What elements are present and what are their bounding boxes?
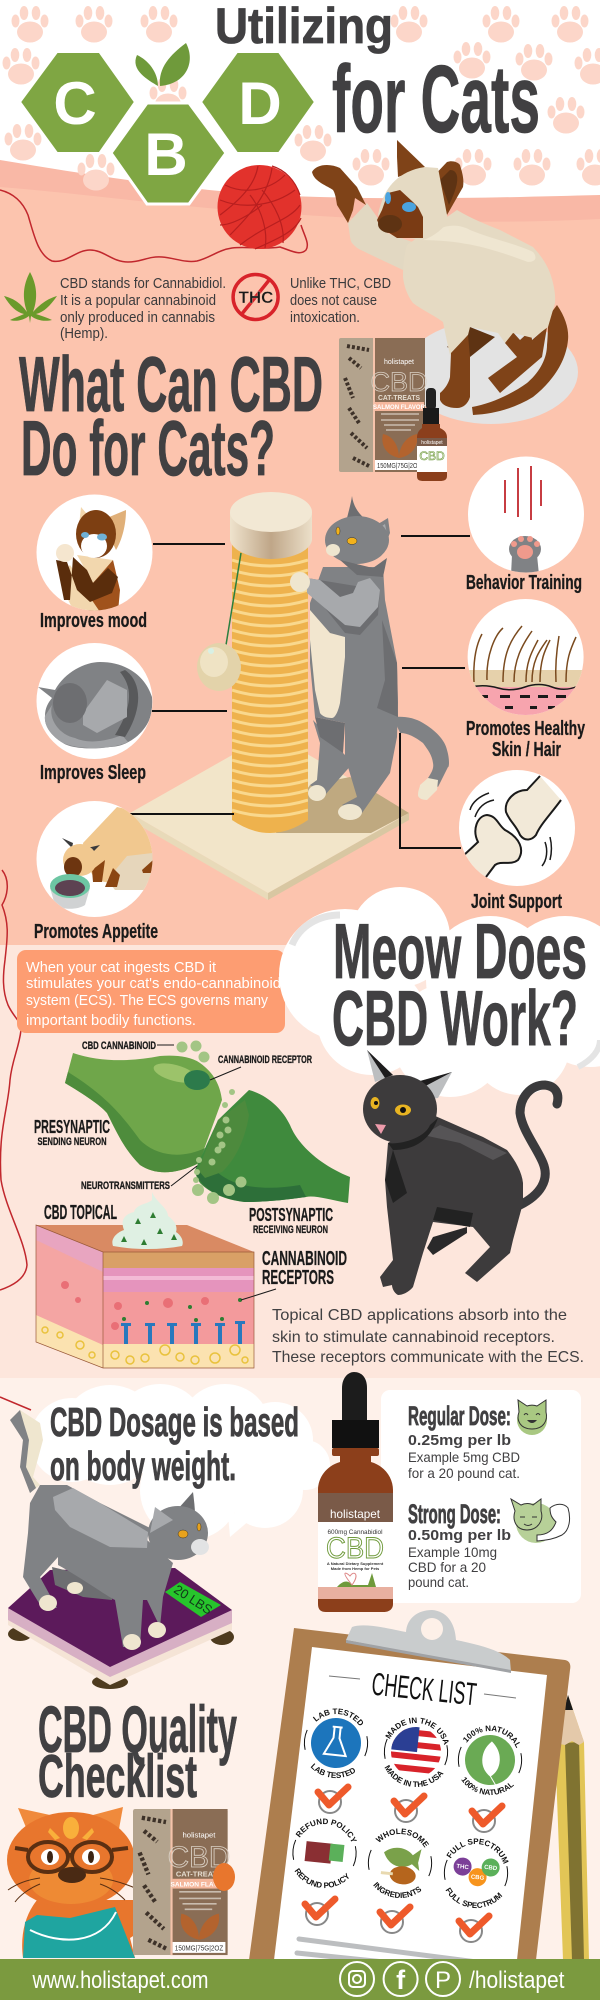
badge: made in the USA: MADE IN THE USA bbox=[385, 1718, 449, 1745]
icon: facebook: f bbox=[396, 1965, 406, 1995]
receptors bbox=[121, 1321, 245, 1344]
badge: 100% natural bbox=[458, 1726, 522, 1796]
postsynaptic neuron bbox=[195, 1090, 350, 1203]
hexagon B bbox=[111, 103, 226, 204]
product: small dropper bottle: holistapet bbox=[421, 440, 443, 446]
badge: full spectrum bbox=[444, 1838, 509, 1908]
circle: improves mood bbox=[36, 494, 152, 612]
tail bbox=[393, 717, 449, 787]
front face layers bbox=[103, 1252, 254, 1268]
heading: CBD Dosage is based on body weight: on body weight. bbox=[50, 1443, 236, 1489]
presynaptic neuron bbox=[65, 1053, 222, 1172]
icon: pencil bbox=[555, 1695, 589, 1960]
label: promotes appetite: Promotes Appetite bbox=[34, 921, 158, 943]
heading: What Can CBD Do for Cats?: Do for Cats? bbox=[21, 404, 275, 492]
saddle bbox=[53, 1488, 148, 1548]
ears bbox=[347, 496, 364, 518]
orange explanation box bbox=[17, 950, 285, 1033]
side shade bbox=[377, 620, 398, 717]
product: small dropper bottle: CBD bbox=[419, 449, 445, 463]
CBD dropper bottle: 600mg Cannabidiol bbox=[328, 1530, 382, 1536]
text: topical CBD explanation: Topical CBD applications absorb into the bbox=[272, 1307, 567, 1324]
badge: lab tested: LAB TESTED bbox=[310, 1763, 355, 1778]
eyes bbox=[178, 1523, 201, 1538]
badge: 100% natural: 100% NATURAL bbox=[463, 1726, 520, 1748]
cat shadow bbox=[404, 320, 578, 424]
product: treat bag bbox=[339, 338, 428, 472]
strong dose text: Example 10mg bbox=[408, 1544, 497, 1560]
badge: full spectrum: CBD bbox=[484, 1865, 498, 1872]
badge: refund policy bbox=[292, 1818, 357, 1888]
head bbox=[325, 516, 389, 564]
body bbox=[403, 210, 555, 355]
connector lines bbox=[130, 536, 470, 848]
head bbox=[378, 167, 448, 240]
regular dose text: for a 20 pound cat. bbox=[408, 1465, 520, 1481]
regular dose text: 0.25mg per lb bbox=[408, 1432, 511, 1449]
icon: yarn ball bbox=[218, 165, 302, 249]
head bbox=[7, 1812, 135, 1908]
body bbox=[23, 1485, 173, 1647]
heading: CBD Dosage is based on body weight: CBD Dosage is based bbox=[50, 1399, 299, 1445]
icon: facebook bbox=[384, 1962, 418, 1996]
product: treat bag: CBD bbox=[370, 367, 428, 397]
product: treat bag: 150MG|75G|2OZ bbox=[377, 463, 422, 470]
circle: promotes appetite bbox=[36, 801, 153, 917]
strong dose text: CBD for a 20 bbox=[408, 1559, 486, 1575]
inner shade bbox=[447, 327, 495, 357]
skin labels: CBD TOPICAL bbox=[44, 1202, 117, 1224]
text: topical CBD explanation bbox=[272, 1307, 584, 1366]
head bbox=[363, 1075, 437, 1143]
badge: wholesome ingredients bbox=[368, 1828, 432, 1898]
base platform bbox=[130, 813, 268, 900]
hexagon D: D bbox=[238, 70, 282, 137]
placeholder lines bbox=[297, 1939, 500, 1972]
heading: Meow Does CBD Work? bbox=[332, 907, 587, 1062]
front leg bbox=[440, 335, 470, 408]
icon: instagram bbox=[340, 1962, 374, 1996]
scarf bbox=[23, 1907, 135, 1958]
tail bbox=[472, 305, 568, 415]
label: promotes healthy skin and hair: Skin / Hair bbox=[492, 739, 561, 761]
forehead marks bbox=[48, 1817, 94, 1840]
icon: hemp leaf bbox=[4, 272, 57, 323]
icon: strong cat bbox=[511, 1499, 570, 1543]
under belly bbox=[52, 1567, 115, 1600]
back leg bbox=[488, 327, 547, 393]
product: treat bag: CAT-TREATS bbox=[378, 395, 420, 402]
product: treat bag held by cat: CAT-TREATS bbox=[176, 1870, 222, 1879]
text: Unlike THC: Unlike THC, CBD bbox=[290, 275, 391, 292]
clipboard bbox=[249, 1610, 570, 1959]
paper bbox=[274, 1647, 547, 1960]
orange explanation box: system (ECS). The ECS governs many bbox=[26, 992, 268, 1009]
red string along left edge bbox=[0, 870, 27, 1290]
black cat bbox=[363, 1050, 558, 1295]
text: CBD stands for Cannabidiol bbox=[60, 275, 226, 342]
hexagon C: C bbox=[53, 70, 97, 137]
check list title: CHECK LIST bbox=[370, 1666, 478, 1712]
strong dose text: Strong Dose: bbox=[408, 1499, 501, 1529]
heading: What Can CBD Do for Cats?: What Can CBD bbox=[19, 340, 323, 428]
body and arm bbox=[22, 1900, 140, 1958]
nose bbox=[58, 1867, 86, 1883]
arm bbox=[307, 578, 380, 635]
post bbox=[232, 540, 308, 840]
neuron labels: CANNABINOID RECEPTOR bbox=[218, 1054, 312, 1066]
post top bbox=[230, 512, 312, 559]
heading: CBD Dosage is based on body weight bbox=[50, 1399, 299, 1489]
CBD dropper bottle: Made from Hemp for Pets bbox=[331, 1566, 380, 1571]
badge: full spectrum: FULL SPECTRUM bbox=[446, 1887, 502, 1908]
scratching post with cat bbox=[130, 492, 449, 900]
gray standing cat bbox=[290, 496, 449, 820]
product: treat bag held by cat: 150MG|75G|2OZ bbox=[175, 1944, 223, 1953]
badge: made in the USA bbox=[384, 1718, 449, 1787]
CBD hexagon logo bbox=[20, 43, 315, 204]
badge: refund policy: REFUND POLICY bbox=[296, 1818, 357, 1842]
neuron labels bbox=[34, 1040, 333, 1236]
back highlight bbox=[423, 1125, 507, 1160]
skin labels: RECEPTORS bbox=[262, 1267, 334, 1289]
eyes and nose bbox=[370, 1097, 411, 1134]
product: treat bag held by cat: CBD bbox=[168, 1841, 230, 1874]
badge: full spectrum: FULL SPECTRUM bbox=[446, 1838, 509, 1864]
paws bbox=[39, 1582, 166, 1650]
back leg bbox=[427, 1227, 467, 1255]
label: promotes healthy skin and hair bbox=[466, 718, 586, 761]
thought cloud bbox=[279, 887, 600, 1097]
badge: 100% natural: 100% NATURAL bbox=[461, 1777, 514, 1796]
icon: no THC bbox=[233, 274, 278, 320]
cat paw on bag bbox=[213, 1863, 235, 1891]
text: CBD stands for Cannabidiol: It is a popular cannabinoid bbox=[60, 292, 216, 309]
skin labels bbox=[44, 1202, 347, 1300]
neurotransmitter dots bbox=[176, 1040, 246, 1204]
clip bbox=[346, 1610, 511, 1672]
cannabinoid receptor bbox=[184, 1070, 210, 1090]
top face bbox=[36, 1225, 254, 1252]
text: Unlike THC bbox=[290, 275, 391, 326]
heading: What Can CBD Do for Cats? bbox=[19, 340, 323, 492]
siamese cat bbox=[312, 140, 578, 424]
orange explanation box: important bodily functions. bbox=[26, 1012, 196, 1029]
arm bbox=[348, 203, 415, 270]
neuron labels: RECEIVING NEURON bbox=[253, 1224, 328, 1236]
strong dose text bbox=[408, 1499, 511, 1590]
badge: wholesome ingredients: INGREDIENTS bbox=[373, 1882, 422, 1898]
paw print pattern bbox=[2, 6, 600, 190]
neuron labels: NEUROTRANSMITTERS bbox=[81, 1180, 170, 1192]
circle: improves sleep bbox=[36, 643, 152, 759]
label: improves mood: Improves mood bbox=[40, 610, 147, 632]
product: treat bag held by cat bbox=[133, 1809, 230, 1955]
website: www.holistapet.com bbox=[32, 1967, 208, 1994]
circle: behavior training bbox=[468, 456, 584, 575]
label: joint support: Joint Support bbox=[471, 891, 562, 913]
far leg bbox=[310, 720, 353, 795]
check marks row 2 bbox=[305, 1899, 489, 1942]
strong dose text: pound cat. bbox=[408, 1574, 469, 1590]
regular dose text bbox=[408, 1401, 520, 1481]
arm marking bbox=[312, 165, 366, 223]
ears bbox=[367, 1050, 393, 1082]
eyes bbox=[41, 1849, 100, 1865]
yarn thread bbox=[0, 190, 307, 262]
neuron labels: PRESYNAPTIC bbox=[34, 1117, 110, 1137]
neuron diagram bbox=[65, 1040, 350, 1204]
tail tip bbox=[418, 778, 438, 800]
CBD topical cream bbox=[112, 1192, 183, 1249]
text: CBD stands for Cannabidiol: only produced in cannabis bbox=[60, 309, 215, 326]
belly shade bbox=[433, 1207, 473, 1227]
CBD dropper bottle: holistapet bbox=[330, 1507, 381, 1521]
hexagon C bbox=[20, 52, 135, 153]
whiskers bbox=[8, 1878, 135, 1902]
hexagon D bbox=[201, 52, 315, 153]
social handle: /holistapet bbox=[469, 1967, 565, 1994]
orange explanation box: stimulates your cat's endo-cannabinoid bbox=[26, 975, 281, 992]
dots bbox=[61, 1281, 209, 1330]
belly bbox=[310, 610, 345, 718]
circle: healthy skin and hair bbox=[465, 599, 587, 717]
product: small dropper bottle bbox=[417, 388, 447, 481]
ears bbox=[177, 1492, 195, 1515]
speech cloud bbox=[30, 1384, 330, 1540]
icon: no THC: THC bbox=[239, 288, 273, 307]
CBD dropper bottle: CBD bbox=[326, 1532, 384, 1565]
eyes bbox=[385, 192, 416, 212]
board bbox=[249, 1628, 570, 1960]
text: CBD stands for Cannabidiol: CBD stands for Cannabidiol. bbox=[60, 275, 226, 292]
neuron labels: POSTSYNAPTIC bbox=[249, 1205, 333, 1225]
face mask bbox=[377, 190, 423, 238]
CBD dropper bottle: A Natural Dietary Supplement bbox=[327, 1561, 384, 1566]
tail bbox=[520, 1085, 558, 1205]
icon: happy cat bbox=[517, 1400, 547, 1435]
strong dose text: 0.50mg per lb bbox=[408, 1527, 511, 1544]
ears bbox=[18, 1808, 50, 1842]
string end bbox=[0, 1397, 31, 1410]
badge: refund policy: REFUND POLICY bbox=[294, 1868, 349, 1888]
torso and near leg bbox=[310, 567, 398, 813]
badge: lab tested: LAB TESTED bbox=[312, 1708, 363, 1726]
badge: wholesome ingredients: WHOLESOME bbox=[375, 1828, 429, 1848]
product: treat bag held by cat: SALMON FLAVOR bbox=[170, 1881, 228, 1888]
icon: leaves bbox=[135, 43, 190, 86]
cat shadow on base bbox=[276, 777, 409, 833]
white dosage card bbox=[381, 1390, 581, 1603]
footer bar bbox=[0, 1959, 600, 2000]
scale display: 20 LBS bbox=[171, 1582, 216, 1618]
badge: full spectrum: THC bbox=[456, 1864, 470, 1871]
icon: pinterest bbox=[426, 1962, 460, 1996]
product: treat bag held by cat: holistapet bbox=[183, 1830, 216, 1839]
heading: CBD Quality Checklist bbox=[38, 1692, 237, 1810]
neuron labels: CBD CANNABINOID bbox=[82, 1040, 156, 1052]
ears bbox=[397, 140, 425, 177]
orange cat with glasses bbox=[7, 1807, 140, 1958]
synaptic cleft bbox=[198, 1100, 249, 1178]
skin layer diagram bbox=[36, 1192, 254, 1368]
glasses bbox=[28, 1842, 112, 1872]
tail bbox=[10, 1410, 43, 1493]
text: CBD stands for Cannabidiol: (Hemp). bbox=[60, 325, 108, 342]
bathroom scale bbox=[8, 1568, 234, 1689]
text: Unlike THC: intoxication. bbox=[290, 309, 360, 326]
text: topical CBD explanation: skin to stimulate cannabinoid receptors. bbox=[272, 1329, 555, 1346]
body bbox=[380, 1115, 523, 1295]
left face bbox=[36, 1225, 103, 1368]
icon: pinterest: P bbox=[435, 1967, 451, 1994]
text: topical CBD explanation: These receptors communicate with the ECS. bbox=[272, 1349, 584, 1366]
regular dose text: Example 5mg CBD bbox=[408, 1449, 520, 1465]
head bbox=[148, 1506, 208, 1560]
heading: CBD Quality Checklist: CBD Quality bbox=[38, 1692, 237, 1766]
gray cat on scale bbox=[10, 1410, 209, 1650]
product: treat bag: holistapet bbox=[384, 359, 414, 366]
check marks row 1 bbox=[318, 1787, 502, 1832]
circle: joint support bbox=[459, 770, 575, 886]
badge: lab tested bbox=[304, 1708, 368, 1778]
orange explanation box: When your cat ingests CBD it bbox=[26, 959, 217, 976]
heading: CBD Quality Checklist: Checklist bbox=[38, 1743, 197, 1810]
hexagon B: B bbox=[144, 121, 188, 188]
skin labels: CANNABINOID bbox=[262, 1248, 347, 1270]
badge: full spectrum: CBG bbox=[471, 1875, 485, 1882]
neuron labels: SENDING NEURON bbox=[38, 1136, 107, 1148]
CBD dropper bottle bbox=[318, 1372, 393, 1612]
product: treat bag: SALMON FLAVOR bbox=[373, 405, 426, 411]
string and ball toy bbox=[197, 553, 241, 691]
label: improves sleep: Improves Sleep bbox=[40, 762, 146, 784]
foot bbox=[338, 804, 362, 820]
badge: made in the USA: MADE IN THE USA bbox=[384, 1764, 444, 1787]
regular dose text: Regular Dose: bbox=[408, 1401, 511, 1431]
text: Unlike THC: does not cause bbox=[290, 292, 377, 309]
